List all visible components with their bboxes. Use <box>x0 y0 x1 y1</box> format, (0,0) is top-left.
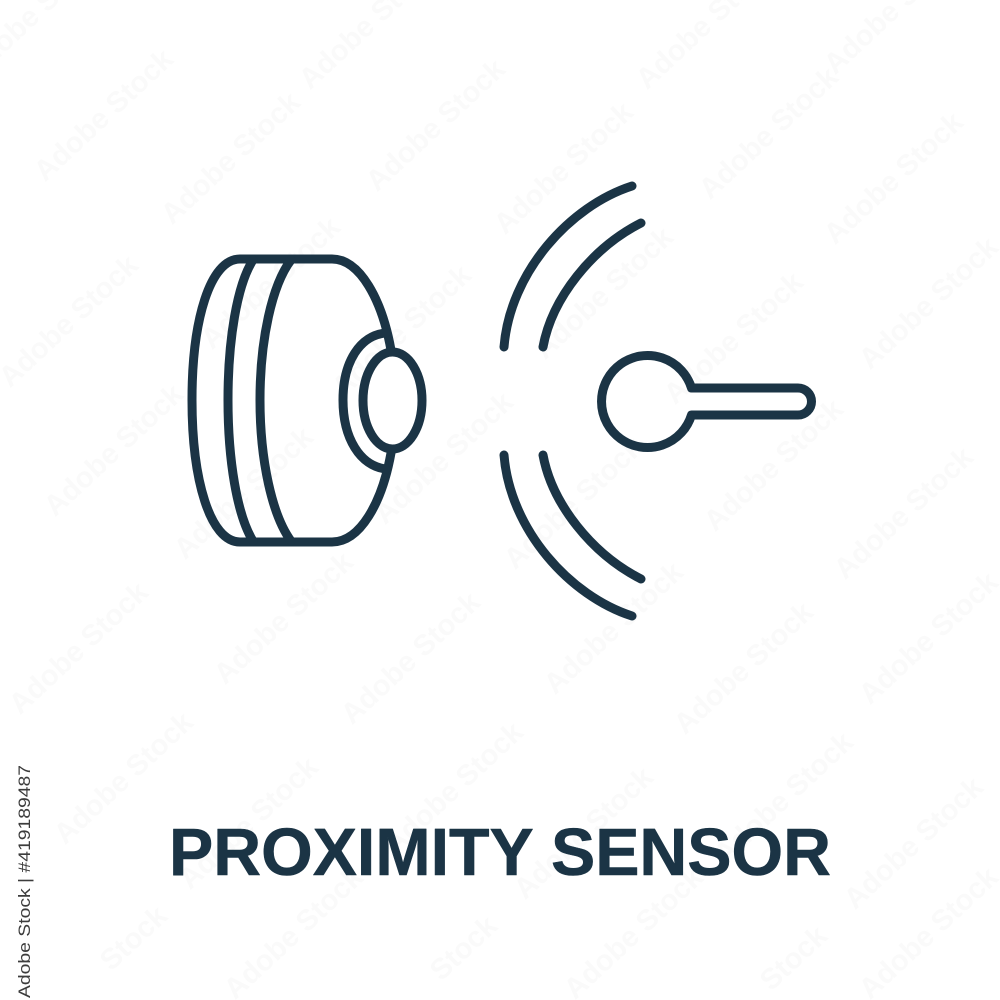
text: Adobe Stock <box>368 386 520 531</box>
housing ring: middle <box>228 260 253 541</box>
icon: proximity sensor body <box>192 259 422 542</box>
upper inner wave <box>543 223 641 347</box>
text: Adobe Stock <box>488 96 640 241</box>
text: Adobe Stock <box>498 431 650 576</box>
text: Adobe Stock <box>28 43 180 188</box>
housing ring: front <box>260 260 291 541</box>
icon: detection waves <box>504 186 641 616</box>
sensor lens collar <box>343 333 386 469</box>
lower inner wave <box>543 455 641 579</box>
text: Adobe Stock <box>208 546 360 691</box>
lower outer wave <box>504 455 632 616</box>
text: Adobe Stock <box>168 421 320 566</box>
text: Adobe Stock <box>3 576 155 721</box>
icon: detected target object <box>602 356 812 447</box>
text: Adobe Stock <box>668 596 820 741</box>
text: Adobe Stock <box>528 221 680 366</box>
text: Adobe Stock <box>48 706 200 851</box>
text: Adobe Stock <box>378 716 530 861</box>
text: Stock <box>754 919 834 997</box>
text: Adobe Stock <box>658 266 810 411</box>
text: Adobe Stock <box>195 211 347 356</box>
text: Adobe Stock <box>326 259 478 404</box>
text: Adobe Stock <box>38 378 190 523</box>
text: Adobe Stock <box>335 586 487 731</box>
upper outer wave <box>504 186 632 347</box>
sensor housing outline <box>192 259 391 542</box>
sensor lens <box>363 352 422 449</box>
text: Adobe Stock <box>155 86 307 231</box>
text: Stock <box>424 909 504 987</box>
text: Stock <box>94 899 174 977</box>
text: Adobe Stock <box>698 393 850 538</box>
text: Adobe Stock <box>538 556 690 701</box>
text: Adobe Stock <box>693 61 845 206</box>
text: Adobe Stock <box>708 726 860 871</box>
text: Adobe Stock <box>818 106 970 251</box>
text: Adobe Stock <box>173 751 325 896</box>
text: Adobe Stock <box>360 53 512 198</box>
text: Adobe Stock <box>828 441 980 586</box>
text: Adobe Stock <box>508 761 660 906</box>
stock credit: Adobe Stock | #419189487 <box>15 765 34 998</box>
text: Adobe Stock <box>838 771 990 916</box>
title: PROXIMITY SENSOR <box>169 815 831 890</box>
